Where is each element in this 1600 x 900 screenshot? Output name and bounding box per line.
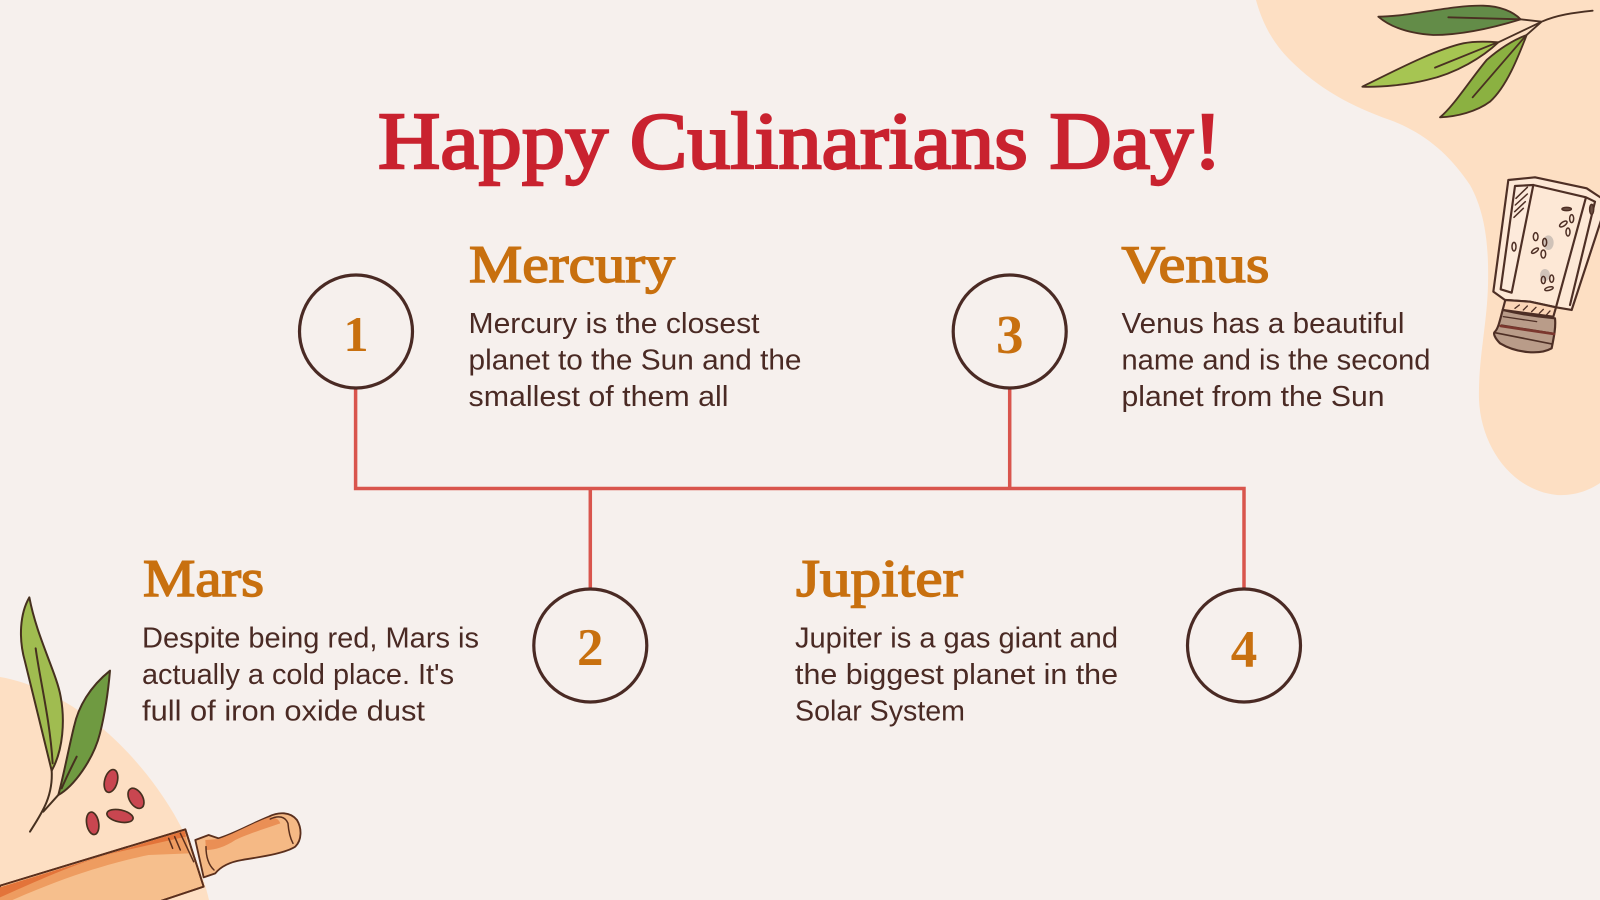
text block: Venus: Venus has a beautiful xyxy=(1122,308,1404,340)
icon: bottom left leaves xyxy=(21,597,110,832)
circle 4: 4 xyxy=(1231,621,1257,679)
top right peach blob xyxy=(1256,0,1600,495)
circle 3 xyxy=(953,275,1066,388)
text block: Mars: Mars xyxy=(143,550,264,608)
circle 1: 1 xyxy=(344,306,368,362)
text block: Mercury: smallest of them all xyxy=(468,381,728,413)
text block: Mars: actually a cold place. It's xyxy=(142,659,454,691)
text block: Jupiter: the biggest planet in the xyxy=(795,659,1118,691)
text block: Jupiter: Jupiter xyxy=(796,550,963,608)
circle 3: 3 xyxy=(996,304,1023,365)
text block: Jupiter: Solar System xyxy=(795,696,965,728)
connector lines xyxy=(356,389,1244,588)
title: Happy Culinarians Day! xyxy=(378,96,1222,186)
icon: rolling pin xyxy=(0,813,301,900)
icon: red seeds xyxy=(85,768,147,836)
text block: Mercury: Mercury is the closest xyxy=(468,308,760,340)
text block: Mercury xyxy=(468,236,802,413)
circle 4 xyxy=(1188,589,1300,702)
text block: Mars: Despite being red, Mars is xyxy=(142,622,479,654)
icon: top right leaves xyxy=(1362,6,1593,117)
circle 2 xyxy=(534,589,647,702)
circle 1 xyxy=(300,275,412,388)
text block: Mercury: Mercury xyxy=(469,236,676,294)
text block: Jupiter xyxy=(795,550,1118,728)
text block: Mars: full of iron oxide dust xyxy=(142,696,425,728)
text block: Venus: planet from the Sun xyxy=(1122,381,1384,413)
text block: Mars xyxy=(142,550,479,728)
text block: Jupiter: Jupiter is a gas giant and xyxy=(795,622,1118,654)
circle 2: 2 xyxy=(577,619,604,677)
bottom left peach blob xyxy=(0,677,209,900)
text block: Mercury: planet to the Sun and the xyxy=(468,344,802,376)
icon: salt shaker xyxy=(1493,177,1600,352)
text block: Venus: name and is the second xyxy=(1122,344,1430,376)
text block: Venus xyxy=(1122,236,1430,413)
text block: Venus: Venus xyxy=(1122,236,1270,294)
